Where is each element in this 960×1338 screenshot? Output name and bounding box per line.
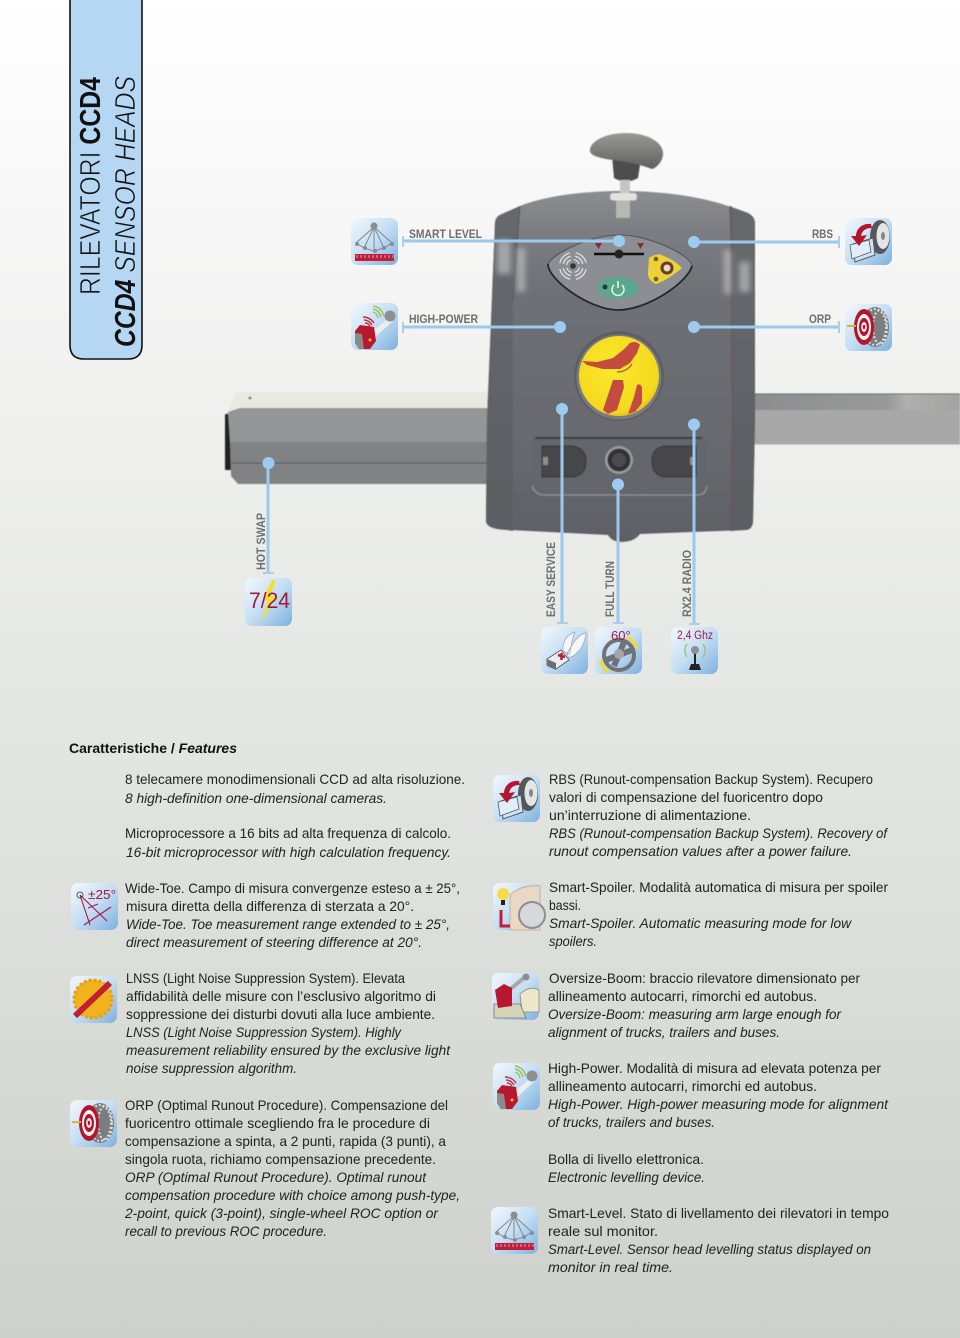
text: wide-toe: direct measurement of steering difference at 20°. (126, 934, 422, 950)
text: smart level: monitor in real time. (548, 1259, 673, 1275)
text: smart level: reale sul monitor. (548, 1223, 658, 1239)
text: LNSS: LNSS (Light Noise Suppression System). Elevata (126, 970, 405, 986)
text: RBS: RBS (Runout-compensation Backup System). Recovery of (549, 825, 889, 841)
icon: smart-spoiler (493, 883, 545, 930)
text: smart level (548, 1205, 889, 1275)
text: cameras: 8 telecamere monodimensionali CCD ad alta risoluzione. (125, 771, 465, 787)
text: smart-spoiler: bassi. (549, 897, 581, 913)
highlights (497, 240, 750, 294)
text: ORP: 2-point, quick (3-point), single-wheel ROC option or (124, 1205, 439, 1221)
yellow logo button (574, 331, 664, 421)
bubble level (594, 253, 644, 255)
text: electronic level (548, 1151, 705, 1185)
text: high power: allineamento autocarri, rimorchi ed autobus. (548, 1078, 817, 1094)
text: oversize boom: allineamento autocarri, rimorchi ed autobus. (548, 988, 817, 1004)
callout: hot swap: HOT SWAP (256, 513, 268, 570)
callout: RBS (688, 229, 839, 248)
icon: ORP (70, 1100, 117, 1147)
icon: easy service (541, 627, 588, 674)
text: wide-toe: Wide-Toe. Campo di misura convergenze esteso a ± 25°, (125, 880, 460, 896)
callout: RX2.4 radio (682, 418, 700, 624)
text: ORP: recall to previous ROC procedure. (125, 1223, 327, 1239)
icon: smart level (491, 1207, 538, 1254)
icon: full turn 60 degrees: 60° (611, 628, 631, 643)
text: ORP: fuoricentro ottimale scegliendo fra le procedure di (125, 1115, 430, 1131)
callout: ORP (688, 314, 839, 333)
text: oversize boom: alignment of trucks, trailers and buses. (548, 1024, 780, 1040)
text: high power: of trucks, trailers and buses. (548, 1114, 715, 1130)
text: microprocessor: Microprocessore a 16 bits ad alta frequenza di calcolo. (125, 825, 451, 841)
icon: high power (351, 303, 398, 350)
text: LNSS: measurement reliability ensured by the exclusive light (126, 1042, 451, 1058)
text: wide-toe: misura diretta della differenza di sterzata a 20°. (126, 898, 414, 914)
signal mark (560, 252, 586, 280)
text: RBS: RBS (Runout-compensation Backup System). Recupero (549, 771, 873, 787)
callout: easy service (546, 403, 568, 623)
callout: easy service: EASY SERVICE (546, 542, 558, 617)
icon: full turn 60 degrees (595, 627, 642, 674)
text: oversize boom (548, 970, 860, 1040)
text: ORP: ORP (Optimal Runout Procedure). Compensazione del (125, 1097, 448, 1113)
icon: hot swap 7/24 (245, 578, 292, 626)
power button (598, 277, 638, 299)
callout: hot swap (256, 457, 274, 573)
callout: smart level: SMART LEVEL (409, 229, 482, 241)
left boom arm (225, 392, 490, 484)
icon: high power (493, 1063, 540, 1110)
title tab (70, 0, 142, 359)
icon: wide-toe (71, 883, 118, 930)
callout: high-power (403, 314, 566, 333)
heading: features: Caratteristiche / Features (69, 741, 238, 756)
text: RBS: valori di compensazione del fuoricentro dopo (549, 789, 823, 805)
text: smart-spoiler: spoilers. (549, 933, 597, 949)
text: high power: High-Power. High-power measuring mode for alignment (548, 1096, 889, 1112)
icon: ORP (845, 304, 892, 351)
callout: RBS: RBS (812, 229, 833, 241)
text: smart-spoiler: Smart-Spoiler. Modalità automatica di misura per spoiler (549, 879, 888, 895)
text: smart level: Smart-Level. Sensor head levelling status displayed on (548, 1241, 871, 1257)
text: LNSS: soppressione dei disturbi dovuti alla luce ambiente. (126, 1006, 435, 1022)
icon: wide-toe: ±25° (88, 887, 116, 902)
housing (486, 191, 755, 542)
text: ORP (124, 1097, 460, 1239)
text: cameras (125, 771, 465, 806)
icon: RBS (493, 775, 540, 822)
yellow wheel badge (648, 254, 682, 284)
icon: 2.4 GHz radio (671, 627, 718, 674)
text: ORP: compensazione a spinta, a 2 punti, rapida (3 punti), a (125, 1133, 446, 1149)
text: RBS: runout compensation values after a power failure. (549, 843, 852, 859)
text: RBS (549, 771, 889, 859)
text: RBS: un’interruzione di alimentazione. (549, 807, 751, 823)
right boom arm (750, 394, 960, 444)
text: ORP: singola ruota, richiamo compensazione precedente. (125, 1151, 436, 1167)
callout: full turn (605, 478, 624, 623)
text: wide-toe: Wide-Toe. Toe measurement range extended to ± 25°, (126, 916, 450, 932)
text: LNSS: noise suppression algorithm. (126, 1060, 297, 1076)
callout: full turn: FULL TURN (605, 561, 617, 617)
text: LNSS: LNSS (Light Noise Suppression System). Highly (126, 1024, 402, 1040)
title tab: RILEVATORI CCD4 (75, 77, 107, 295)
callout: ORP: ORP (809, 314, 831, 326)
icon: RBS (845, 218, 892, 265)
text: high power: High-Power. Modalità di misura ad elevata potenza per (548, 1060, 881, 1076)
text: LNSS: affidabilità delle misure con l’esclusivo algoritmo di (126, 988, 436, 1004)
icon: smart level (351, 218, 398, 265)
text: smart level: Smart-Level. Stato di livellamento dei rilevatori in tempo (548, 1205, 889, 1221)
text: electronic level: Bolla di livello elettronica. (548, 1151, 704, 1167)
text: smart-spoiler: Smart-Spoiler. Automatic measuring mode for low (549, 915, 852, 931)
text: microprocessor (125, 825, 451, 860)
icon: LNSS (70, 976, 117, 1023)
control panel (548, 235, 692, 310)
text: high power (548, 1060, 889, 1130)
text: wide-toe (125, 880, 460, 950)
text: smart-spoiler (549, 879, 888, 949)
text: cameras: 8 high-definition one-dimensional cameras. (125, 790, 387, 806)
text: microprocessor: 16-bit microprocessor with high calculation frequency. (126, 844, 451, 860)
callout: RX2.4 radio: RX2.4 RADIO (682, 550, 694, 617)
knob (590, 133, 663, 218)
icon: hot swap 7/24: 7/24 (249, 588, 290, 613)
text: ORP: ORP (Optimal Runout Procedure). Optimal runout (125, 1169, 427, 1185)
sensor head device (486, 133, 755, 542)
text: LNSS (126, 970, 451, 1076)
callout: smart level (403, 229, 625, 247)
callout: high-power: HIGH-POWER (409, 314, 479, 326)
icon: 2.4 GHz radio: 2,4 Ghz (677, 630, 713, 642)
lens recess (532, 437, 707, 495)
text: oversize boom: Oversize-Boom: measuring arm large enough for (548, 1006, 842, 1022)
text: oversize boom: Oversize-Boom: braccio rilevatore dimensionato per (549, 970, 860, 986)
text: ORP: compensation procedure with choice among push-type, (125, 1187, 460, 1203)
title tab: CCD4 SENSOR HEADS (110, 75, 142, 347)
icon: oversize boom (492, 973, 539, 1020)
text: electronic level: Electronic levelling device. (548, 1169, 705, 1185)
